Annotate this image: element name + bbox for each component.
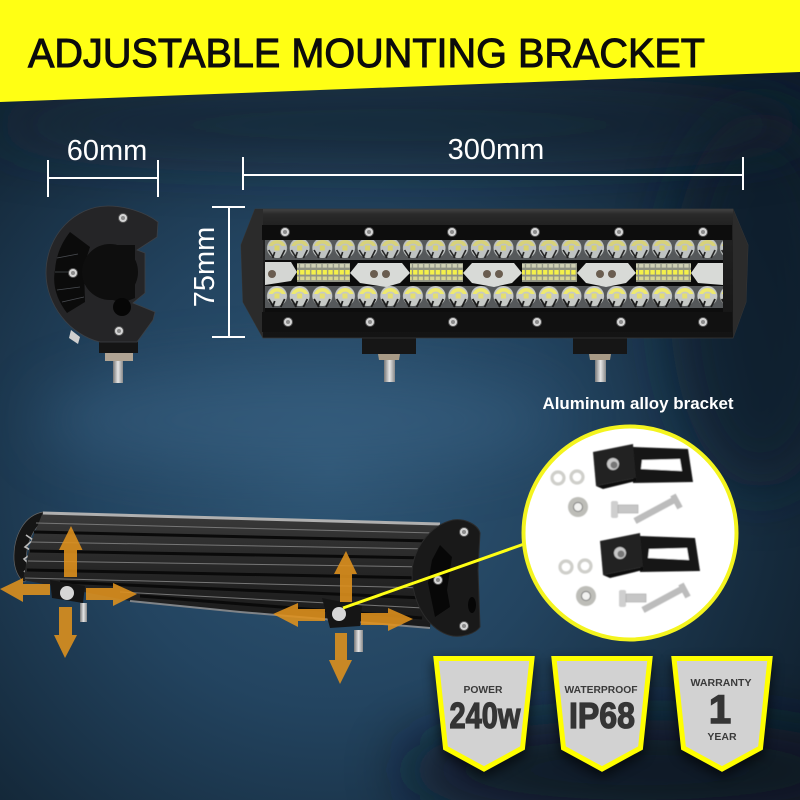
left end cap: [14, 512, 50, 582]
adjustment arrows: right bracket: [273, 551, 413, 684]
dimension: 60mm width: 60mm: [67, 135, 147, 167]
badge: warranty: WARRANTY: [690, 677, 752, 689]
dimension: 60mm width: [48, 135, 158, 197]
bracket set 1: [552, 444, 693, 521]
title: ADJUSTABLE MOUNTING BRACKET: [28, 30, 705, 76]
right mounting clamp: [322, 598, 363, 652]
badge: power: 240w: [450, 695, 521, 736]
badge: warranty: YEAR: [707, 731, 737, 743]
adjustment arrows: left bracket: [0, 526, 137, 658]
badge: warranty: 1: [709, 688, 731, 732]
dimension: 300mm length: 300mm: [448, 134, 544, 166]
badge: power: [433, 658, 535, 777]
callout: bracket hardware: [524, 426, 736, 640]
title banner: [0, 0, 800, 102]
callout heading: Aluminum alloy bracket: [542, 394, 734, 413]
mounting screws: [280, 228, 708, 326]
callout leader line: [343, 543, 527, 608]
badge: warranty: [671, 658, 773, 777]
badge: waterproof: WATERPROOF: [564, 684, 638, 696]
front view of LED light bar: [241, 209, 748, 382]
badge: power: POWER: [464, 684, 503, 696]
mounting feet: [362, 331, 627, 382]
dimension: 300mm length: [243, 134, 743, 190]
angled view of light bar: [14, 512, 480, 652]
right end plate: [412, 520, 480, 636]
housing: [241, 209, 748, 338]
dimension: 75mm height: [189, 207, 245, 337]
left mounting clamp: [50, 580, 87, 622]
dimension: 75mm height: 75mm: [189, 227, 221, 307]
side view of light bar end cap: [46, 206, 158, 383]
bracket set 2: [560, 533, 700, 610]
LED array: [265, 240, 723, 312]
finned body: [23, 512, 440, 628]
badge: waterproof: [551, 658, 653, 777]
badge: waterproof: IP68: [569, 695, 635, 736]
